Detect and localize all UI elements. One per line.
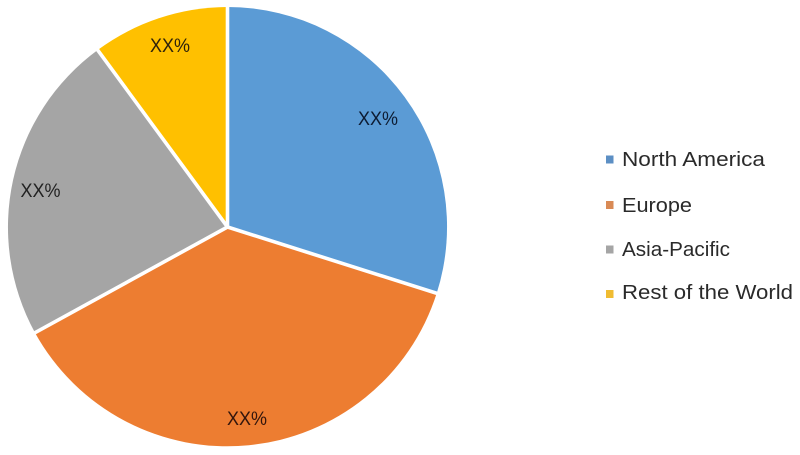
slice: Asia-Pacific xyxy=(8,50,228,333)
pie chart xyxy=(8,5,447,446)
label: Asia-Pacific value: XX% xyxy=(20,180,60,202)
slice: Rest of the World xyxy=(98,7,228,227)
label: Rest of the World value: XX% xyxy=(150,35,190,57)
data labels xyxy=(20,35,398,430)
slice separators xyxy=(33,5,439,334)
legend xyxy=(606,148,793,304)
slice: North America xyxy=(228,7,447,293)
label: Europe value: XX% xyxy=(227,408,267,430)
legend item: Rest of the World: Rest of the World xyxy=(622,281,793,304)
slice: Europe xyxy=(35,227,437,446)
label: North America value: XX% xyxy=(358,108,398,130)
legend item: North America: North America xyxy=(622,148,766,171)
legend item: Europe: Europe xyxy=(622,194,692,217)
legend item: Asia-Pacific: Asia-Pacific xyxy=(622,238,730,261)
